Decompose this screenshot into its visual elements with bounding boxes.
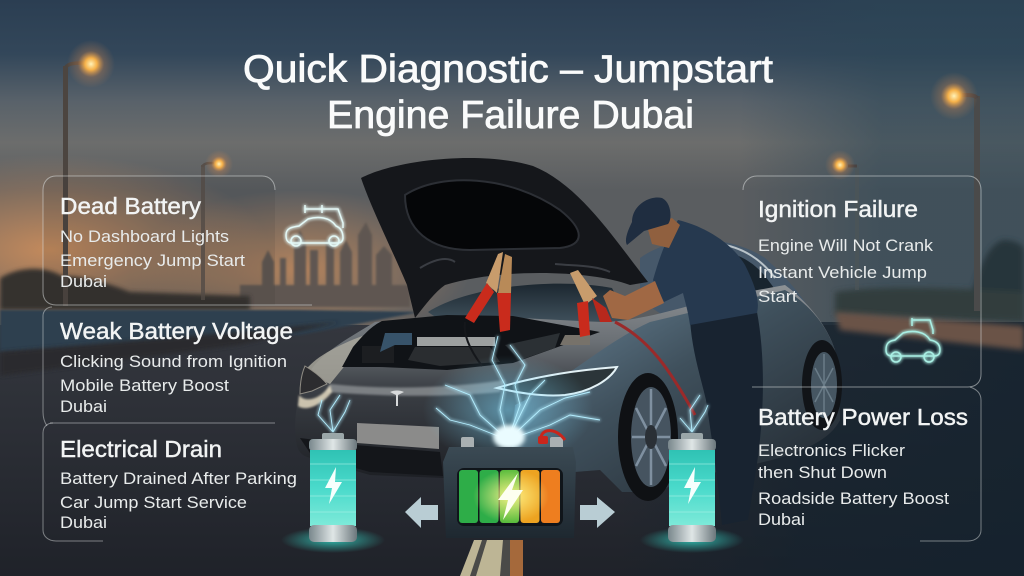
- left arrow: [405, 497, 438, 528]
- road marking: [460, 540, 523, 576]
- lightning arcs: [318, 336, 708, 440]
- symptom and service text: No Dashboard Lights: [60, 227, 229, 246]
- symptom and service text: [60, 352, 287, 416]
- charge level segments: [459, 470, 560, 523]
- symptom and service text: Engine Will Not Crank: [758, 236, 934, 255]
- right headlight: [497, 367, 617, 395]
- background: skyline: [240, 222, 410, 307]
- heading: Electrical Drain: [60, 436, 222, 462]
- street lamp mid left: [201, 150, 233, 300]
- windshield: [428, 284, 630, 322]
- panel: electrical drain: [43, 423, 297, 541]
- panel: ignition failure: [743, 176, 981, 387]
- street lamp right: [930, 72, 980, 311]
- heading: Dead Battery: [60, 193, 202, 219]
- heading: Battery Power Loss: [758, 404, 968, 430]
- symptom and service text: [60, 227, 245, 291]
- symptom and service text: Battery Drained After Parking: [60, 469, 297, 488]
- left clamp: [465, 252, 512, 332]
- background: dusk sky: [0, 0, 1024, 350]
- rear wheel: [802, 340, 842, 430]
- left battery cell: [281, 433, 385, 553]
- title: [243, 48, 773, 137]
- symptom and service text: Emergency Jump Start: [60, 251, 245, 270]
- symptom and service text: [758, 441, 949, 529]
- right battery cell: [640, 433, 744, 553]
- hood lip highlight: [326, 380, 505, 396]
- right fender and door: [510, 290, 840, 492]
- title: Quick Diagnostic – Jumpstart: [243, 48, 773, 91]
- central car battery: [443, 431, 576, 538]
- symptom and service text: Start: [758, 287, 797, 306]
- technician: [603, 197, 763, 525]
- rear cabin: [640, 240, 825, 340]
- symptom and service text: Electronics Flicker: [758, 441, 905, 460]
- icon: car with jump cables, left: [286, 205, 343, 246]
- symptom and service text: Clicking Sound from Ignition: [60, 352, 287, 371]
- lightning glow: [423, 355, 593, 465]
- grille: [300, 438, 443, 476]
- symptom and service text: [60, 469, 297, 532]
- title: Engine Failure Dubai: [327, 94, 694, 137]
- red cable: [615, 322, 695, 415]
- background: left treeline: [0, 269, 250, 310]
- side windows: [708, 250, 792, 322]
- shirt: [653, 220, 758, 325]
- forearm and hands: [603, 281, 664, 320]
- symptom and service text: Car Jump Start Service: [60, 493, 247, 512]
- roof chrome line: [705, 243, 775, 278]
- symptom and service text: Dubai: [60, 397, 107, 416]
- engine bay: [342, 315, 600, 370]
- number plate: [357, 423, 439, 449]
- symptom and service text: Instant Vehicle Jump: [758, 263, 927, 282]
- cap: [626, 197, 670, 245]
- trousers: [690, 312, 763, 525]
- symptom and service text: Dubai: [60, 272, 107, 291]
- background: right palms and hedge: [835, 240, 1024, 322]
- panel: battery power loss: [758, 387, 981, 541]
- left fender highlight: [304, 335, 365, 384]
- panel: weak battery voltage: [43, 307, 293, 426]
- right arrow: [580, 497, 615, 528]
- face: [647, 218, 680, 248]
- symptom and service text: [758, 236, 934, 306]
- left headlight: [300, 366, 327, 394]
- hood: [361, 158, 648, 318]
- heading: Weak Battery Voltage: [60, 318, 293, 344]
- street lamp mid right: [825, 150, 859, 290]
- symptom and service text: then Shut Down: [758, 463, 887, 482]
- badge: [390, 390, 404, 406]
- icon: car with jump cables, right: [886, 318, 940, 362]
- symptom and service text: Roadside Battery Boost: [758, 489, 949, 508]
- front wheel: [618, 373, 678, 501]
- symptom and service text: Dubai: [60, 513, 107, 532]
- jumper clamps and cables: [465, 252, 695, 415]
- spark core: [493, 425, 525, 449]
- car: [295, 158, 842, 501]
- heading: Ignition Failure: [758, 196, 918, 222]
- background: road: [0, 310, 1024, 576]
- panel: dead battery: [43, 176, 312, 305]
- black cable: [465, 322, 482, 366]
- right clamp: [570, 270, 612, 337]
- headlight glow: [298, 385, 332, 408]
- street lamp left: [63, 40, 115, 306]
- car body: [295, 285, 840, 492]
- symptom and service text: Dubai: [758, 510, 805, 529]
- symptom and service text: Mobile Battery Boost: [60, 376, 229, 395]
